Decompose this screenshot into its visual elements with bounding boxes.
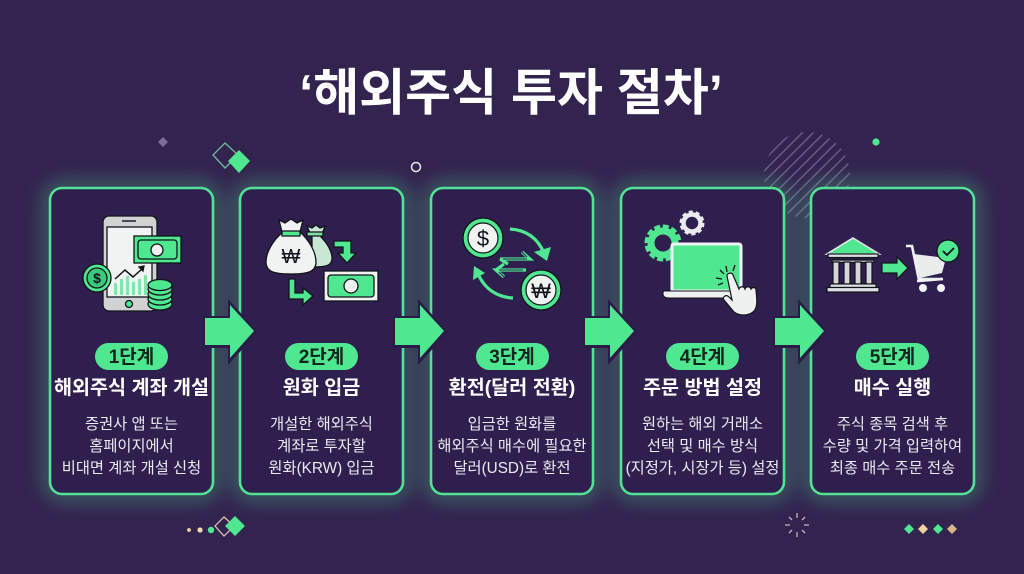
step description: 선택 및 매수 방식 — [647, 438, 758, 455]
icon: currency exchange — [463, 218, 561, 310]
icon: gears, laptop and hand — [646, 212, 757, 315]
arrow: step 2 to 3 — [393, 299, 448, 365]
step description: 증권사 앱 또는 — [85, 416, 178, 433]
arrow: step 1 to 2 — [203, 299, 258, 365]
step description: (지정가, 시장가 등) 설정 — [626, 460, 779, 477]
step description: 달러(USD)로 환전 — [453, 460, 571, 477]
card glows — [50, 188, 974, 494]
decoration: bottom left dots and diamonds — [187, 516, 245, 536]
panel: step 2 — [240, 188, 403, 494]
step description: 수량 및 가격 입력하여 — [823, 438, 962, 455]
step description: 주식 종목 검색 후 — [837, 416, 948, 433]
step badge: 3단계 — [489, 346, 535, 368]
step description: 비대면 계좌 개설 신청 — [62, 460, 201, 477]
step description: 홈페이지에서 — [89, 437, 174, 455]
icon: bank, arrow and shopping cart — [827, 238, 959, 292]
step description — [268, 416, 375, 477]
step badge — [856, 343, 929, 370]
step description: 원하는 해외 거래소 — [642, 416, 763, 433]
arrow: step 4 to 5 — [773, 299, 828, 365]
step badge: 4단계 — [680, 346, 725, 368]
step description — [437, 416, 587, 477]
step heading: 환전(달러 전환) — [449, 377, 575, 399]
step badge: 2단계 — [299, 346, 344, 368]
icon: money bags to bill — [266, 219, 378, 305]
title: ‘해외주식 투자 절차’ — [299, 65, 723, 121]
icon: money bags to bill: ₩ — [282, 246, 301, 268]
step heading: 원화 입금 — [283, 377, 360, 399]
step badge — [666, 343, 739, 370]
step badge — [285, 343, 358, 370]
step heading: 해외주식 계좌 개설 — [54, 377, 209, 399]
step description: 최종 매수 주문 전송 — [830, 460, 955, 477]
icon: phone with money and chart — [83, 216, 181, 311]
step badge: 5단계 — [870, 346, 915, 368]
step heading: 주문 방법 설정 — [643, 377, 762, 399]
step badge: 1단계 — [109, 346, 154, 368]
decoration: top left diamonds — [158, 137, 250, 173]
decoration: hatched circle — [764, 132, 850, 218]
step badge — [476, 343, 549, 370]
step description — [62, 416, 201, 477]
step description: 해외주식 매수에 필요한 — [437, 438, 587, 455]
decoration: sparkle — [785, 513, 809, 537]
panel: step 5 — [811, 188, 974, 494]
step heading: 매수 실행 — [854, 377, 931, 399]
arrow: step 3 to 4 — [583, 299, 638, 365]
step description — [823, 416, 962, 477]
panel: step 3 — [431, 188, 593, 494]
step badge — [95, 343, 168, 370]
step description: 원화(KRW) 입금 — [268, 460, 375, 477]
icon: currency exchange: ₩ — [531, 280, 551, 303]
panel: step 4 — [621, 188, 784, 494]
step description: 입금한 원화를 — [468, 416, 556, 433]
decoration: green dot — [872, 138, 880, 146]
decoration: ring — [412, 162, 420, 172]
decoration: bottom right diamonds — [904, 524, 957, 534]
icon: currency exchange: $ — [477, 226, 489, 251]
panel: step 1 — [50, 188, 213, 494]
step description — [626, 416, 779, 477]
step description: 계좌로 투자할 — [277, 438, 366, 455]
step description: 개설한 해외주식 — [270, 416, 373, 433]
icon: phone with money and chart: $ — [93, 270, 101, 286]
